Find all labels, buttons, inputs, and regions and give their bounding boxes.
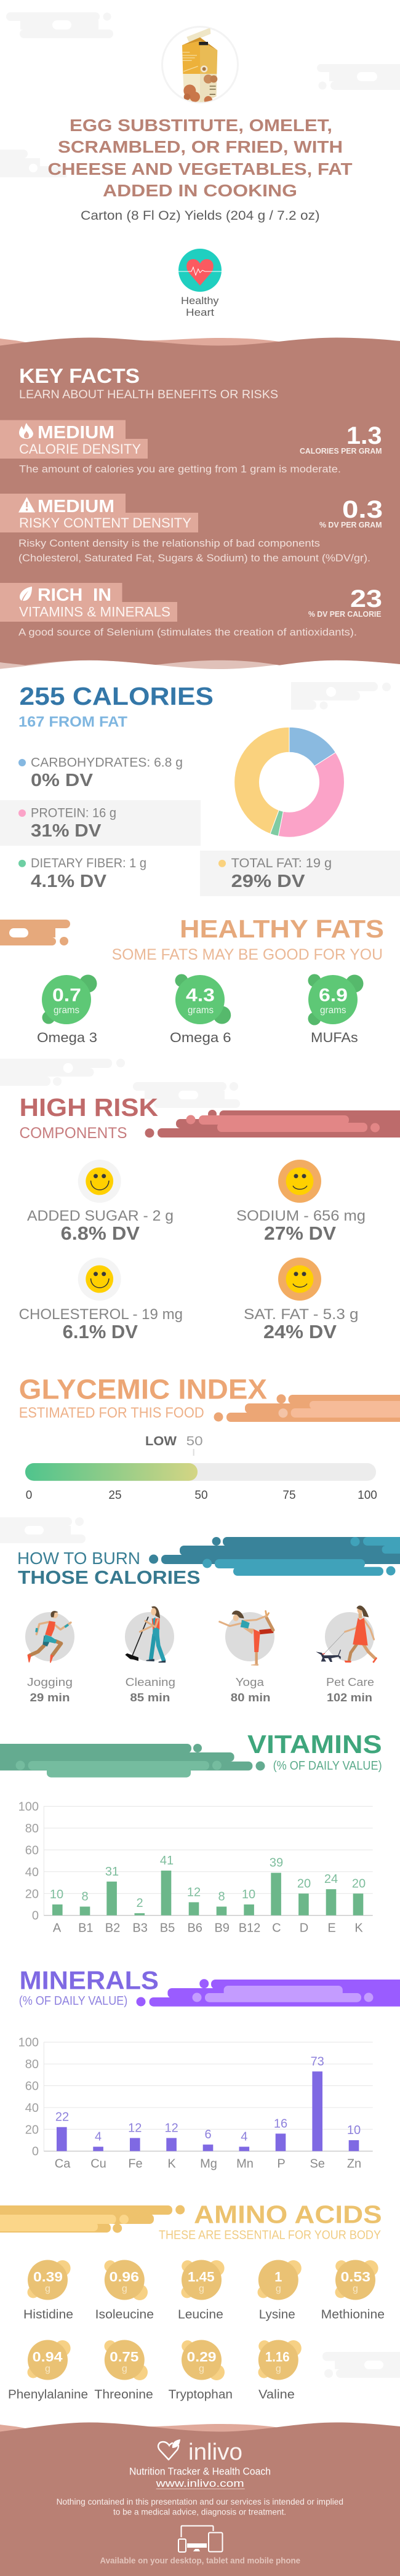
bar chart: minerals: Cu	[90, 2157, 106, 2171]
donut chart	[234, 727, 344, 837]
bar chart: vitamins: 41	[160, 1854, 174, 1868]
gauge scale: 25	[108, 1489, 122, 1502]
bar chart: vitamins: 24	[324, 1872, 338, 1886]
heading: key facts: KEY FACTS	[19, 364, 140, 387]
stat: omega 3: 0.7	[52, 985, 81, 1006]
bar chart: minerals: 4	[95, 2130, 102, 2144]
bar chart: vitamins: 39	[270, 1856, 283, 1870]
food image: carton	[162, 27, 238, 104]
banner: orange cloud	[0, 920, 70, 945]
bar chart: vitamins: 2	[136, 1896, 143, 1910]
legend: protein: PROTEIN: 16 g	[31, 806, 116, 821]
badge: healthy heart: Healthy	[181, 295, 219, 307]
bar chart: vitamins: 100	[18, 1800, 39, 1813]
bar chart: vitamins: 20	[25, 1887, 39, 1901]
risk: cholesterol	[19, 1258, 183, 1342]
banner: red cloud	[145, 1110, 400, 1138]
activity: yoga	[220, 1611, 274, 1704]
panel: how to burn those calories	[17, 1537, 400, 1704]
gauge label: LOW	[145, 1434, 177, 1448]
activity: yoga: 80 min	[231, 1691, 271, 1704]
amino: tryptophan: Tryptophan	[169, 2388, 233, 2402]
bar chart: minerals: 12	[128, 2121, 142, 2135]
banner: green cloud	[0, 1744, 265, 1778]
gauge scale: 100	[358, 1489, 377, 1502]
fact: risky content density: MEDIUM	[38, 497, 114, 516]
activity: pet care: Pet Care	[326, 1676, 374, 1688]
fact: calorie density	[0, 420, 382, 475]
activity: yoga: Yoga	[236, 1676, 265, 1688]
title: CHEESE AND VEGETABLES, FAT	[48, 159, 352, 179]
amino: lysine: 1	[274, 2269, 282, 2285]
website link: www.inlivo.com	[155, 2478, 244, 2489]
fact: calorie density: 1.3	[346, 422, 382, 449]
amino: valine: 1.16	[265, 2349, 289, 2365]
legend: carbohydrates: 0% DV	[31, 771, 94, 790]
subheading: (% OF DAILY VALUE)	[19, 1994, 127, 2008]
amino: phenylalanine: g	[45, 2364, 50, 2374]
amino: phenylalanine: 0.94	[33, 2349, 63, 2365]
bar chart: minerals: 100	[18, 2036, 39, 2050]
heading: healthy fats: HEALTHY FATS	[180, 915, 384, 943]
bar chart: vitamins: B12	[239, 1922, 260, 1935]
amino: valine: g	[276, 2364, 281, 2374]
bar chart: minerals: 20	[25, 2123, 39, 2137]
gauge label	[145, 1434, 203, 1456]
panel: glycemic index	[19, 1374, 400, 1502]
bar chart: vitamins: 20	[352, 1877, 366, 1890]
risk: added sugar	[27, 1160, 174, 1244]
amino: leucine	[178, 2260, 225, 2322]
panel: high risk components	[19, 1093, 400, 1342]
bar chart: vitamins: B1	[78, 1922, 94, 1935]
heading: minerals: MINERALS	[20, 1966, 159, 1995]
fact: risky content density: % DV PER GRAM	[319, 520, 382, 529]
fact: rich in vitamins and minerals: VITAMINS & MINERALS	[19, 604, 170, 619]
fact: rich in vitamins and minerals: % DV PER CALORIE	[308, 609, 382, 619]
amino: histidine: 0.39	[33, 2269, 63, 2285]
logo: inlivo	[158, 2439, 242, 2465]
amino: valine	[258, 2340, 302, 2402]
bar chart: vitamins: 0	[32, 1909, 39, 1923]
stat: MUFAs	[308, 974, 363, 1045]
subheading: from fat: 167 FROM FAT	[18, 714, 127, 731]
heading: vitamins: VITAMINS	[247, 1730, 382, 1759]
fact: rich in vitamins and minerals: 23	[350, 585, 382, 612]
fact: calorie density: The amount of calories you are getting from 1 gram is moderate.	[19, 463, 341, 475]
legend: total fat	[200, 851, 400, 896]
stat: MUFAs: grams	[320, 1005, 346, 1016]
subheading: (% OF DAILY VALUE)	[273, 1759, 382, 1773]
fact: rich in vitamins and minerals	[0, 583, 382, 638]
bar chart: minerals: Zn	[347, 2157, 361, 2171]
bar chart: vitamins: 40	[25, 1866, 39, 1879]
title	[48, 116, 352, 200]
bar chart: vitamins: 31	[105, 1865, 119, 1879]
bar chart: vitamins: B2	[105, 1922, 120, 1935]
activity: cleaning	[125, 1607, 175, 1704]
heading: those calories: THOSE CALORIES	[18, 1567, 201, 1588]
activity: jogging	[25, 1611, 74, 1704]
activity: cleaning: 85 min	[130, 1691, 170, 1704]
amino: isoleucine: Isoleucine	[95, 2308, 154, 2322]
bar chart: minerals: Fe	[128, 2157, 143, 2171]
gauge scale: 75	[282, 1489, 296, 1502]
risk: sodium: 27% DV	[264, 1222, 336, 1244]
activity: jogging: 29 min	[30, 1691, 70, 1704]
activity: jogging: Jogging	[27, 1676, 73, 1688]
panel: healthy fats	[0, 915, 384, 1045]
amino: lysine: g	[276, 2284, 281, 2294]
stat: MUFAs: MUFAs	[311, 1030, 358, 1045]
bar chart: vitamins	[18, 1800, 373, 1935]
panel: key facts	[0, 337, 400, 669]
amino: leucine: 1.45	[188, 2269, 214, 2285]
amino: histidine: g	[45, 2284, 50, 2294]
availability note: Available on your desktop, tablet and mobile phone	[100, 2556, 300, 2566]
bar chart: vitamins: D	[300, 1922, 308, 1935]
banner: teal cloud	[149, 1537, 400, 1576]
fact: risky content density: RISKY CONTENT DENSITY	[19, 515, 191, 531]
legend: dietary fiber: 4.1% DV	[31, 872, 107, 891]
bar chart: vitamins: B6	[187, 1922, 202, 1935]
bar chart: vitamins: 10	[242, 1888, 255, 1901]
panel: amino acids	[0, 2200, 385, 2402]
bar chart: minerals: 10	[347, 2124, 361, 2137]
title: SCRAMBLED, OR FRIED, WITH	[58, 137, 343, 156]
banner: yellow cloud	[0, 2205, 185, 2233]
bar chart: minerals: 60	[25, 2079, 39, 2093]
title: EGG SUBSTITUTE, OMELET,	[70, 116, 332, 135]
risk: added sugar: ADDED SUGAR - 2 g	[27, 1208, 174, 1224]
bar chart: vitamins: 20	[297, 1877, 311, 1890]
heading: amino acids: AMINO ACIDS	[194, 2200, 382, 2228]
amino: histidine	[23, 2260, 73, 2322]
subheading: SOME FATS MAY BE GOOD FOR YOU	[112, 946, 383, 963]
bar chart: minerals: Se	[310, 2157, 325, 2171]
badge: healthy heart: Heart	[186, 307, 214, 318]
bar chart: vitamins: A	[53, 1922, 62, 1935]
subheading: THESE ARE ESSENTIAL FOR YOUR BODY	[159, 2228, 381, 2242]
bar chart: vitamins: K	[354, 1922, 363, 1935]
serving size subtitle: Carton (8 Fl Oz) Yields (204 g / 7.2 oz)	[81, 209, 320, 223]
bar chart: minerals	[18, 2036, 373, 2171]
amino: tryptophan	[169, 2340, 233, 2402]
bar chart: vitamins: E	[327, 1922, 336, 1935]
stat: omega 6	[170, 974, 231, 1045]
risk: cholesterol: CHOLESTEROL - 19 mg	[19, 1306, 183, 1323]
legend: protein: 31% DV	[31, 821, 102, 841]
bar chart: vitamins: 12	[187, 1885, 201, 1899]
bar chart: minerals: 80	[25, 2058, 39, 2071]
amino: methionine: g	[353, 2284, 358, 2294]
fact: calorie density: CALORIE DENSITY	[19, 441, 141, 457]
bar chart: vitamins: B5	[160, 1922, 175, 1935]
risk: sodium: SODIUM - 656 mg	[236, 1208, 366, 1224]
stat: omega 6: 4.3	[186, 985, 215, 1006]
amino: isoleucine: g	[122, 2284, 127, 2294]
amino: lysine: Lysine	[259, 2308, 295, 2322]
stat: omega 6: grams	[188, 1005, 214, 1016]
gauge scale: 0	[26, 1489, 32, 1502]
gauge label: 50	[186, 1434, 203, 1448]
heading: 255 calories: 255 CALORIES	[20, 682, 214, 710]
risk: saturated fat: 24% DV	[263, 1321, 337, 1342]
bar chart: minerals: Mn	[236, 2157, 254, 2171]
activity: pet care	[316, 1605, 377, 1704]
disclaimer: to be a medical advice, diagnosis or treatment.	[113, 2507, 286, 2517]
gauge bar	[25, 1463, 376, 1481]
panel: vitamins	[0, 1730, 382, 1935]
subheading: ESTIMATED FOR THIS FOOD	[19, 1405, 204, 1421]
legend: dietary fiber: DIETARY FIBER: 1 g	[31, 856, 146, 870]
bar chart: minerals: Ca	[55, 2157, 71, 2171]
legend: carbohydrates	[18, 756, 183, 790]
fact: rich in vitamins and minerals: A good source of Selenium (stimulates the creation of antioxidants).	[18, 627, 357, 638]
risk: sodium	[236, 1160, 366, 1244]
bar chart: minerals: 12	[164, 2121, 178, 2135]
bar chart: minerals: P	[277, 2157, 286, 2171]
bar chart: vitamins: 8	[218, 1890, 225, 1903]
panel: calories	[0, 682, 400, 896]
heading: how to burn: HOW TO BURN	[17, 1549, 140, 1568]
bar chart: vitamins: 8	[81, 1890, 89, 1903]
gauge scale: 50	[194, 1489, 208, 1502]
amino: threonine: g	[122, 2364, 127, 2374]
activity: pet care: 102 min	[327, 1691, 372, 1704]
bar chart: minerals: 22	[55, 2111, 69, 2124]
fact: risky content density: Risky Content density is the relationship of bad components	[18, 537, 320, 549]
banner: purple cloud	[137, 1979, 400, 2007]
stat: omega 3	[37, 975, 97, 1045]
bar chart: vitamins: 60	[25, 1844, 39, 1857]
bar chart: minerals: 16	[274, 2117, 287, 2130]
risk: saturated fat: SAT. FAT - 5.3 g	[244, 1306, 358, 1323]
amino: isoleucine: 0.96	[110, 2269, 139, 2285]
fact: risky content density: (Cholesterol, Saturated Fat, Sugars & Sodium) to the amount (%DV/gr).	[18, 552, 370, 564]
bar chart: vitamins: 80	[25, 1822, 39, 1836]
amino: methionine	[321, 2260, 385, 2322]
amino: valine: Valine	[258, 2388, 295, 2402]
fact: rich in vitamins and minerals: RICH IN	[38, 585, 111, 605]
stat: omega 3: Omega 3	[37, 1030, 97, 1045]
fact: calorie density: MEDIUM	[38, 423, 114, 443]
legend: carbohydrates: CARBOHYDRATES: 6.8 g	[31, 756, 183, 770]
amino: lysine	[257, 2260, 302, 2322]
legend: protein	[0, 800, 201, 846]
risk: cholesterol: 6.1% DV	[63, 1321, 138, 1342]
activity: cleaning: Cleaning	[126, 1676, 175, 1688]
amino: methionine: Methionine	[321, 2308, 385, 2322]
subheading: LEARN ABOUT HEALTH BENEFITS OR RISKS	[19, 388, 278, 401]
amino: isoleucine	[95, 2260, 154, 2322]
amino: phenylalanine: Phenylalanine	[8, 2388, 88, 2402]
disclaimer	[57, 2497, 343, 2517]
stat: MUFAs: 6.9	[319, 985, 348, 1006]
risk: added sugar: 6.8% DV	[61, 1222, 140, 1244]
bar chart: minerals: 6	[204, 2128, 212, 2141]
panel: minerals	[18, 1966, 400, 2171]
bar chart: minerals: 40	[25, 2101, 39, 2115]
amino: tryptophan: g	[199, 2364, 204, 2374]
bar chart: vitamins: B9	[214, 1922, 230, 1935]
amino: threonine	[94, 2340, 153, 2402]
bar chart: vitamins: B3	[132, 1922, 148, 1935]
amino: phenylalanine	[8, 2340, 88, 2402]
risk: saturated fat	[244, 1258, 358, 1342]
fact: risky content density: 0.3	[342, 496, 383, 523]
fact: calorie density: CALORIES PER GRAM	[300, 446, 382, 455]
bar chart: minerals: Mg	[200, 2157, 217, 2171]
tagline: Nutrition Tracker & Health Coach	[129, 2466, 271, 2477]
title: ADDED IN COOKING	[103, 181, 297, 200]
stat: omega 3: grams	[54, 1005, 79, 1016]
logo: inlivo: inlivo	[188, 2439, 242, 2465]
amino: leucine: g	[199, 2284, 204, 2294]
legend: dietary fiber	[18, 856, 146, 891]
legend: total fat: 29% DV	[231, 872, 305, 891]
gauge scale	[26, 1489, 377, 1502]
bar chart: vitamins: 10	[50, 1888, 63, 1901]
disclaimer: Nothing contained in this presentation and our services is intended or implied	[57, 2497, 343, 2506]
amino: threonine: 0.75	[110, 2349, 138, 2365]
bar chart: minerals: K	[167, 2157, 176, 2171]
bar chart: vitamins: C	[272, 1922, 281, 1935]
legend: total fat: TOTAL FAT: 19 g	[231, 856, 332, 870]
amino: tryptophan: 0.29	[187, 2349, 217, 2365]
amino: leucine: Leucine	[178, 2308, 223, 2322]
badge: healthy heart	[178, 249, 222, 318]
heading: glycemic index: GLYCEMIC INDEX	[19, 1374, 267, 1405]
heading: high risk: HIGH RISK	[20, 1093, 158, 1121]
bar chart: minerals: 4	[241, 2130, 247, 2144]
amino: threonine: Threonine	[94, 2388, 153, 2402]
stat: omega 6: Omega 6	[170, 1030, 231, 1045]
fact: risky content density	[0, 494, 383, 564]
bar chart: minerals: 73	[311, 2055, 324, 2068]
subheading: components: COMPONENTS	[20, 1125, 127, 1142]
banner: orange cloud	[214, 1394, 400, 1422]
panel: footer	[0, 2423, 400, 2576]
icon: devices	[178, 2526, 223, 2552]
amino: histidine: Histidine	[23, 2308, 73, 2322]
bar chart: minerals: 0	[32, 2145, 39, 2159]
amino: methionine: 0.53	[341, 2269, 370, 2285]
